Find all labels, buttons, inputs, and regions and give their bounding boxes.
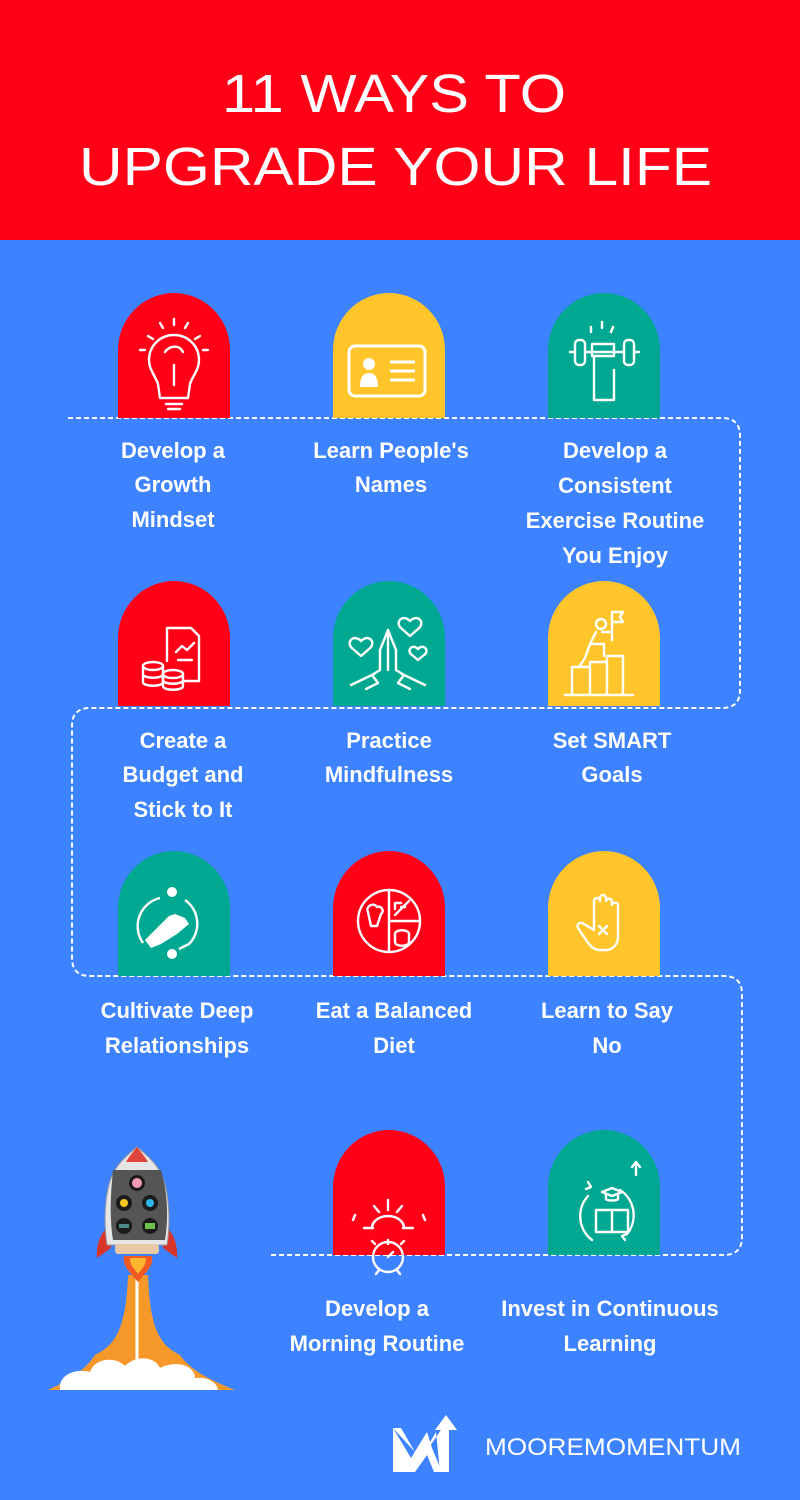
label: Cultivate Deep [101, 998, 253, 1023]
icon: sunrise and alarm clock [353, 1200, 425, 1274]
label: Invest in Continuous [501, 1296, 719, 1321]
fins [97, 1225, 177, 1258]
label: Stick to It [133, 797, 233, 822]
item 11: continuous learning [501, 1130, 719, 1356]
item 6: smart goals [548, 581, 672, 787]
label [122, 728, 244, 822]
icon: dumbbell hand [570, 322, 639, 400]
header banner [0, 0, 800, 240]
label: No [592, 1033, 622, 1058]
item 4: budget [118, 581, 244, 822]
label: Exercise Routine [526, 508, 704, 533]
icon: praying hands with hearts [350, 618, 426, 689]
icon: plate [358, 890, 420, 952]
label: Consistent [558, 473, 673, 498]
icon: M arrow [393, 1428, 442, 1472]
label: Learn People's [313, 438, 469, 463]
item 9: say no [541, 851, 674, 1058]
icon: hand stop [578, 895, 618, 950]
body [105, 1147, 169, 1245]
label: You Enjoy [562, 543, 669, 568]
label [325, 728, 453, 787]
item 10: morning routine [290, 1130, 464, 1356]
label [313, 438, 469, 497]
rocket illustration [48, 1147, 235, 1390]
label: Morning Routine [290, 1331, 464, 1356]
clouds [60, 1358, 218, 1390]
item 1: growth mindset [118, 293, 230, 532]
item 2: names [313, 293, 469, 497]
item 8: diet [316, 851, 472, 1058]
brand name: MOOREMOMENTUM [485, 1434, 741, 1461]
label: Develop a [563, 438, 668, 463]
item 7: relationships [101, 851, 253, 1058]
label: Budget and [122, 762, 244, 787]
label [553, 728, 672, 787]
label [316, 998, 472, 1058]
exhaust [48, 1275, 235, 1390]
item 3: exercise [526, 293, 704, 568]
label: Practice [346, 728, 432, 753]
label: Develop a [325, 1296, 430, 1321]
icon: climbing to flag [565, 612, 633, 695]
label: Mindset [131, 507, 215, 532]
label: Relationships [105, 1033, 249, 1058]
title: UPGRADE YOUR LIFE [79, 137, 712, 197]
label: Mindfulness [325, 762, 453, 787]
label: Create a [140, 728, 227, 753]
label [501, 1296, 719, 1356]
label: Learn to Say [541, 998, 674, 1023]
label: Goals [581, 762, 643, 787]
icon: book cycle [580, 1162, 640, 1240]
label: Eat a Balanced [316, 998, 472, 1023]
label: Learning [564, 1331, 656, 1356]
label: Set SMART [553, 728, 672, 753]
icon: handshake circle [138, 887, 197, 959]
label [290, 1296, 464, 1356]
icon: lightbulb [140, 319, 208, 409]
icon: coins and chart [143, 628, 199, 690]
flame [124, 1256, 152, 1282]
label [541, 998, 674, 1058]
logo [393, 1415, 741, 1472]
dashed path [68, 418, 742, 1255]
title: 11 WAYS TO [222, 64, 566, 124]
label [526, 438, 704, 568]
label: Diet [373, 1033, 415, 1058]
title [79, 64, 712, 197]
label [121, 438, 226, 532]
item 5: mindfulness [325, 581, 453, 787]
icon: id card [349, 346, 425, 396]
label [101, 998, 253, 1058]
label: Growth [134, 472, 212, 497]
label: Names [355, 472, 427, 497]
label: Develop a [121, 438, 226, 463]
